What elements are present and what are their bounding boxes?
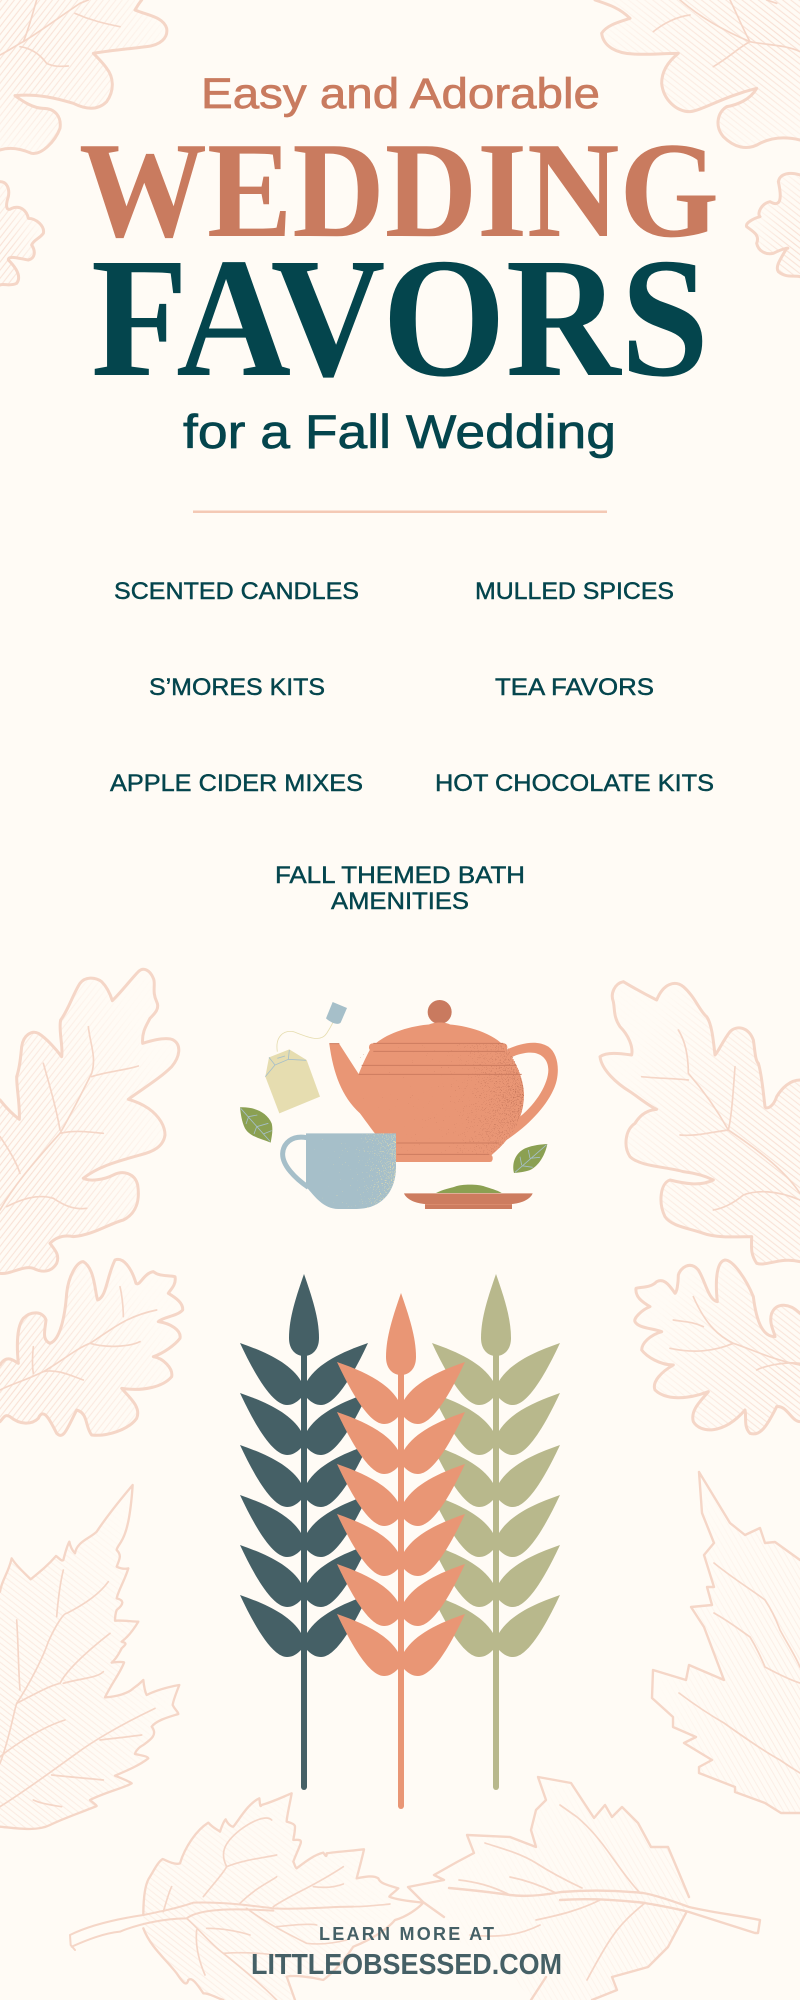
wheat stalk: orange	[337, 1293, 465, 1809]
green leaf left	[240, 1107, 272, 1143]
footer label: learn more at: LEARN MORE AT	[319, 1924, 494, 1944]
decorative leaf: middle left large oak	[0, 969, 179, 1274]
list item: mulled spices: MULLED SPICES	[475, 578, 674, 605]
decorative leaf: bottom left branch	[70, 1793, 423, 2000]
decorative leaf: top left small oak	[0, 182, 44, 285]
decorative leaf: top right small oak	[746, 173, 800, 277]
decorative leaf: middle right large oak	[600, 982, 800, 1264]
decorative leaf: top left oak	[0, 0, 167, 153]
tea bag	[265, 1002, 347, 1113]
list item: tea favors: TEA FAVORS	[495, 674, 654, 701]
wheat stalk: dark teal	[240, 1274, 368, 1790]
title: wedding: WEDDING	[79, 114, 719, 266]
list item: hot chocolate kits: HOT CHOCOLATE KITS	[435, 770, 714, 797]
plate with loose tea	[404, 1185, 533, 1209]
list item: scented candles: SCENTED CANDLES	[114, 578, 359, 605]
list of wedding favors	[110, 578, 714, 915]
list item: fall themed bath amenities	[275, 862, 525, 915]
teacup	[283, 1133, 396, 1209]
title: favors: FAVORS	[91, 223, 709, 412]
wheat stalk: olive	[432, 1274, 560, 1790]
list item: apple cider mixes: APPLE CIDER MIXES	[110, 770, 363, 797]
footer link: littleobsessed.com: LITTLEOBSESSED.COM	[251, 1949, 562, 1981]
subtitle: easy and adorable: Easy and Adorable	[201, 70, 600, 118]
decorative leaf: middle left small oak	[0, 1259, 183, 1435]
green leaf right	[513, 1144, 547, 1173]
teapot	[329, 1000, 558, 1162]
teapot lid knob	[428, 1000, 452, 1024]
footer call to action	[251, 1924, 562, 1981]
list item: fall themed bath amenities: FALL THEMED BATH	[275, 862, 525, 889]
decorative leaf: top right oak	[595, 0, 800, 148]
decorative leaf: lower left serrated	[0, 1485, 179, 1829]
illustration: three wheat stalks	[240, 1274, 560, 1809]
list item: s'mores kits: S’MORES KITS	[149, 674, 325, 701]
subtitle: for a fall wedding: for a Fall Wedding	[183, 405, 616, 458]
decorative leaf: bottom right branch	[408, 1777, 760, 2000]
list item: fall themed bath amenities: AMENITIES	[331, 888, 469, 915]
illustration: teapot, cup, tea bag and leaves	[240, 1000, 558, 1209]
decorative leaf: middle right small oak	[635, 1260, 800, 1434]
decorative leaf: lower right serrated	[652, 1472, 800, 1813]
